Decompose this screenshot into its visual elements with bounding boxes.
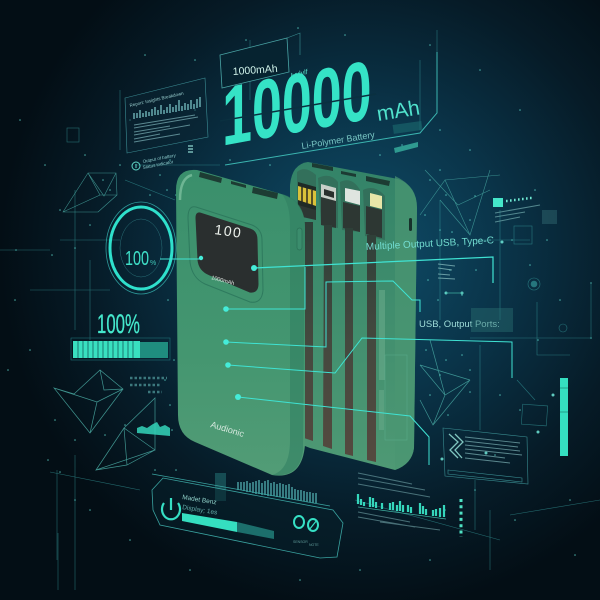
toggle icons [294, 516, 318, 531]
front body [176, 170, 305, 476]
capacity badge: 1000mAh [232, 63, 278, 78]
logo glyph [449, 434, 463, 458]
top ports [312, 163, 390, 186]
icon captions: SENSOR [293, 540, 308, 544]
status panel: NOTE [309, 543, 319, 547]
hatch block [394, 142, 418, 153]
report panel [125, 78, 208, 153]
top highlight [180, 175, 192, 200]
display capacity: 1000mAh [210, 275, 235, 287]
connector type-c [345, 188, 360, 205]
bar chart lower right [358, 473, 446, 530]
subtitle: Li-Polymer Battery [301, 129, 376, 151]
status bar [182, 513, 237, 532]
vertical level bar [560, 378, 568, 456]
capacity number: 10000 [222, 44, 372, 165]
connector lightning [370, 193, 382, 209]
power icon [162, 498, 180, 519]
status dots [446, 292, 463, 294]
unit: mAh [375, 96, 421, 126]
capacity badge [220, 33, 300, 88]
side bevel [272, 194, 305, 475]
charge progress bar [71, 338, 170, 360]
power bank: rear unit [290, 162, 417, 470]
battery ring: 100 [125, 247, 149, 270]
callout chip [443, 428, 528, 484]
brand: Audionic [209, 419, 246, 439]
translucent box [471, 308, 513, 332]
wireframe: upper right [420, 170, 500, 235]
center bar chart at device foot [238, 480, 316, 503]
top ports [199, 172, 278, 199]
mini teal chart [137, 422, 170, 436]
connector micro [321, 184, 336, 203]
model text: Madet Benz [182, 494, 217, 506]
cable bays [297, 169, 385, 240]
power button [297, 228, 302, 250]
display [197, 214, 257, 291]
callout label: USB-C: Multiple Output USB, Type-C [366, 235, 494, 253]
title: 10000 mAh [220, 44, 421, 165]
cable stripes [304, 222, 376, 462]
connector usb [298, 182, 316, 212]
top right data block [493, 198, 557, 224]
status panel [152, 474, 343, 558]
wireframe: upper left [63, 173, 117, 212]
callout dots [199, 256, 257, 400]
side port [409, 218, 412, 231]
power bank: front unit [176, 170, 305, 476]
display text: Display; 1es [182, 504, 218, 517]
document lines [465, 437, 522, 463]
dotted vertical indicator [460, 499, 462, 537]
display ring [188, 207, 263, 302]
cable heads [321, 197, 382, 238]
report panel: Report: Insights Breakdown [129, 91, 185, 108]
display reading: 100 [214, 221, 243, 241]
rear body [290, 162, 417, 470]
spec note: mid right [438, 264, 455, 279]
battery ring: % [150, 260, 156, 267]
info icon and note: Output of battery [142, 153, 177, 164]
segment gap [220, 94, 376, 121]
spec print [379, 290, 385, 380]
small signal text: Ivvlvlf [290, 69, 309, 80]
info icon and note: Status indicator [142, 159, 174, 170]
wireframe: lower left 1 [54, 370, 123, 433]
title frame line [225, 52, 437, 165]
wireframe: lower left 2 [96, 398, 155, 470]
dot matrix [130, 378, 167, 392]
wireframe: lower right [420, 340, 470, 425]
callout lines [160, 257, 512, 465]
callout label: ports: USB, Output Ports: [419, 319, 500, 330]
battery ring [106, 202, 176, 294]
charge percentage: 100% [97, 309, 140, 339]
info icon and note [132, 153, 177, 170]
